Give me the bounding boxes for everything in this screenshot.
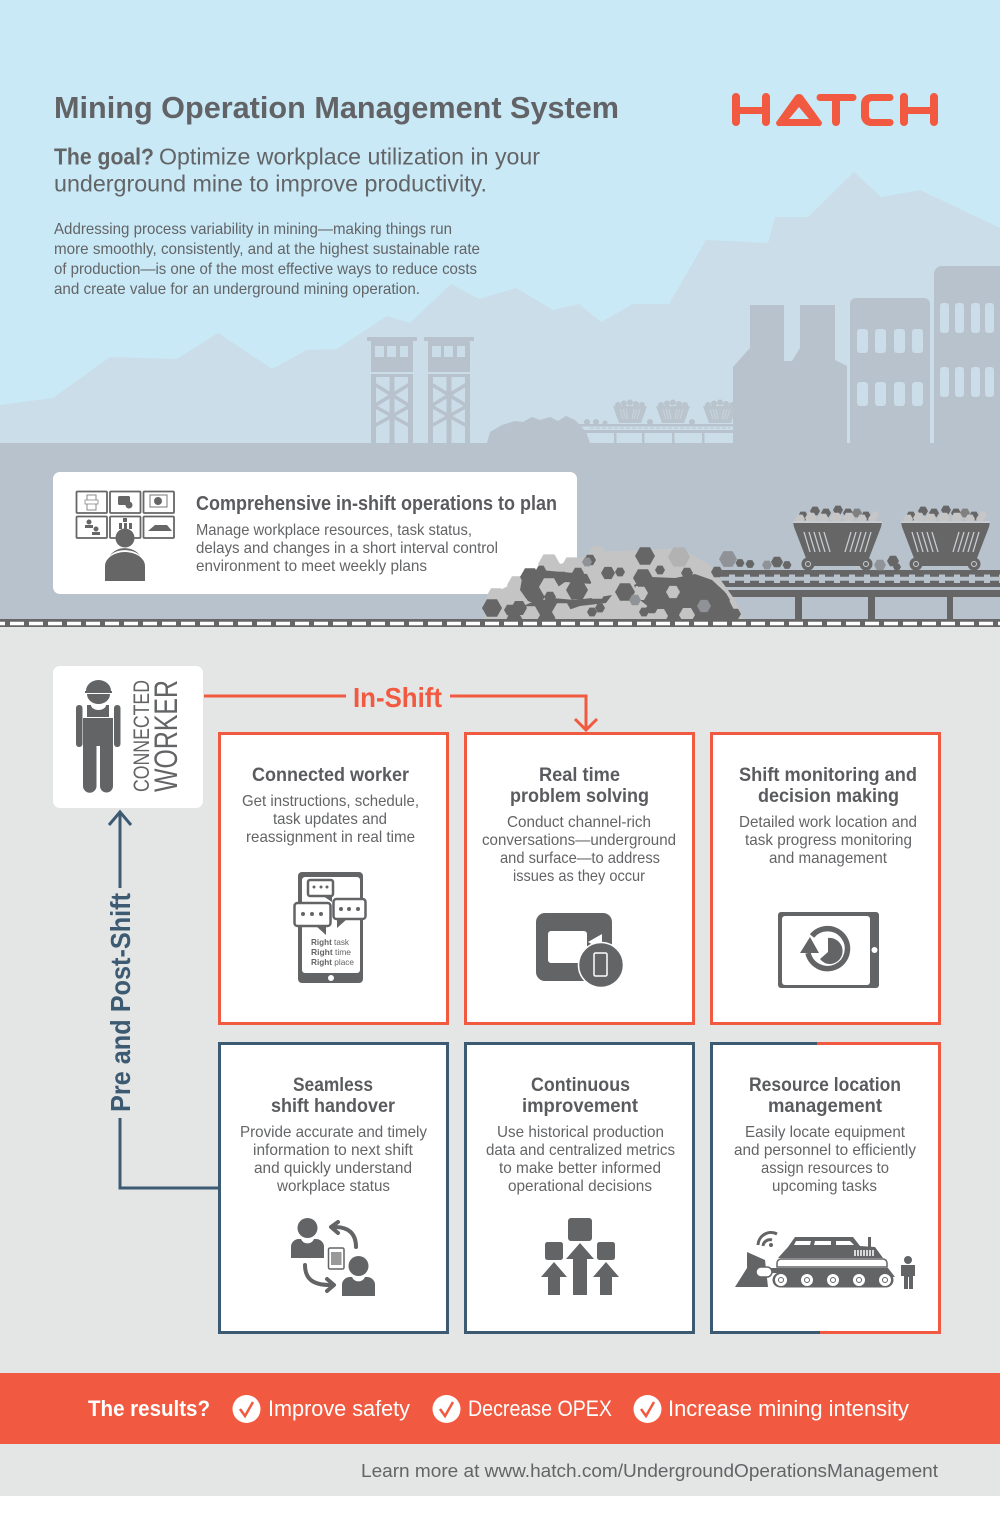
panel: real time problem solving: problem solving <box>510 785 649 807</box>
connected label: CONNECTED <box>129 680 154 792</box>
panel: real time problem solving: Conduct channel-rich <box>507 814 651 831</box>
panel: real time problem solving <box>466 734 694 1024</box>
panel: continuous improvement: data and centralized metrics <box>486 1142 675 1159</box>
icon: video call <box>536 913 624 988</box>
goal statement <box>54 144 540 196</box>
pre and post-shift arrow <box>109 812 219 1188</box>
lower panel background <box>0 627 1000 1373</box>
card heading: Comprehensive in-shift operations to plan <box>196 492 557 515</box>
panel: shift monitoring and decision making <box>712 734 940 1024</box>
panel: continuous improvement: to make better informed <box>499 1160 661 1177</box>
conveyor <box>715 570 1000 620</box>
panel: connected worker: task updates and <box>273 811 387 828</box>
panel: resource location management: Easily locate equipment <box>745 1124 906 1141</box>
panel: resource location management: and personnel to efficiently <box>734 1142 916 1159</box>
panel: shift monitoring and decision making: task progress monitoring <box>745 832 912 849</box>
result: decrease opex <box>432 1395 612 1423</box>
pre and post-shift label: Pre and Post-Shift <box>105 893 136 1112</box>
panel: seamless shift handover <box>220 1044 448 1332</box>
panel: continuous improvement: operational decisions <box>508 1178 652 1195</box>
panel: connected worker: Get instructions, schedule, <box>242 793 419 810</box>
panel: resource location management: assign resources to <box>761 1160 889 1177</box>
panel: resource location management <box>712 1044 940 1332</box>
rocks on conveyor <box>719 551 901 570</box>
mountain range <box>0 172 1000 443</box>
icon: operator at monitors <box>76 492 174 581</box>
building 1 <box>850 298 930 443</box>
panel: seamless shift handover: shift handover <box>271 1095 395 1117</box>
ore rock pile <box>482 546 745 624</box>
panel: seamless shift handover: and quickly understand <box>254 1160 412 1177</box>
results band: The results? <box>88 1396 210 1421</box>
goal statement: underground mine to improve productivity. <box>54 170 487 196</box>
icon: phone with chat bubbles: Right place <box>311 957 354 967</box>
card body <box>196 522 498 575</box>
icon: worker <box>76 680 120 793</box>
building 2 <box>934 266 1000 443</box>
panel: connected worker <box>220 734 448 1024</box>
results band <box>0 1373 1000 1444</box>
result: improve safety: Improve safety <box>268 1396 411 1421</box>
icon: connected dozer and worker <box>735 1233 915 1289</box>
panel: connected worker: Connected worker <box>252 764 409 786</box>
ore carts <box>793 506 990 570</box>
panel: real time problem solving: conversations—underground <box>482 832 676 849</box>
panel: real time problem solving: Real time <box>539 764 620 786</box>
panel: continuous improvement: improvement <box>522 1095 638 1117</box>
intro paragraph: and create value for an underground mining operation. <box>54 281 420 298</box>
panel: seamless shift handover: Provide accurate and timely <box>240 1124 427 1141</box>
result: decrease opex: Decrease OPEX <box>468 1396 612 1421</box>
goal statement: The goal? <box>54 144 154 170</box>
icon: people handing over <box>291 1218 375 1296</box>
panel: seamless shift handover: information to next shift <box>253 1142 414 1159</box>
card body: Manage workplace resources, task status, <box>196 522 472 539</box>
icon: phone with chat bubbles <box>294 872 366 983</box>
panel: resource location management: upcoming tasks <box>772 1178 877 1195</box>
railway track <box>0 619 1000 627</box>
panel: continuous improvement <box>466 1044 694 1332</box>
card body: delays and changes in a short interval control <box>196 540 498 557</box>
in-shift label: In-Shift <box>353 682 442 713</box>
panel: continuous improvement: Use historical production <box>497 1124 664 1141</box>
panel: real time problem solving: issues as they occur <box>513 868 645 885</box>
headframe towers <box>367 337 474 443</box>
footer link <box>0 1444 1000 1496</box>
intro paragraph: more smoothly, consistently, and at the highest sustainable rate <box>54 241 480 258</box>
factory with chimneys <box>733 305 847 443</box>
title: Mining Operation Management System <box>54 90 619 125</box>
result: improve safety <box>232 1395 411 1423</box>
panel: resource location management: Resource location <box>749 1074 901 1096</box>
logo: Hatch <box>732 93 938 126</box>
panel: shift monitoring and decision making: and management <box>769 850 888 867</box>
panel: resource location management: management <box>768 1095 882 1117</box>
panel: continuous improvement: Continuous <box>531 1074 630 1096</box>
footer link: Learn more at www.hatch.com/UndergroundOperationsManagement <box>361 1460 938 1481</box>
card body: environment to meet weekly plans <box>196 558 427 575</box>
panel: seamless shift handover: Seamless <box>293 1074 373 1096</box>
icon: phone with chat bubbles: Right task <box>311 937 350 947</box>
panel: shift monitoring and decision making: Shift monitoring and <box>739 764 917 786</box>
panel: shift monitoring and decision making: Detailed work location and <box>739 814 917 831</box>
intro paragraph <box>54 221 480 298</box>
icon: tablet with history dial <box>778 912 879 988</box>
worker label: WORKER <box>148 680 184 792</box>
icon: arrows and blocks <box>541 1218 619 1295</box>
in-shift arrow <box>204 696 597 730</box>
panel: shift monitoring and decision making: decision making <box>758 785 899 807</box>
panel: connected worker: reassignment in real time <box>246 829 415 846</box>
panel: real time problem solving: and surface—to address <box>500 850 660 867</box>
intro paragraph: Addressing process variability in mining—making things run <box>54 221 452 238</box>
sky background <box>0 0 1000 443</box>
connected worker box <box>53 666 203 808</box>
ground <box>0 443 1000 621</box>
panel: seamless shift handover: workplace status <box>276 1178 390 1195</box>
card: comprehensive in-shift operations <box>53 472 577 594</box>
distant rock heap and conveyor <box>487 400 737 443</box>
intro paragraph: of production—is one of the most effective ways to reduce costs <box>54 261 477 278</box>
icon: phone with chat bubbles: Right time <box>311 947 351 957</box>
goal statement: Optimize workplace utilization in your <box>159 144 540 170</box>
result: increase mining intensity: Increase mining intensity <box>668 1396 910 1421</box>
